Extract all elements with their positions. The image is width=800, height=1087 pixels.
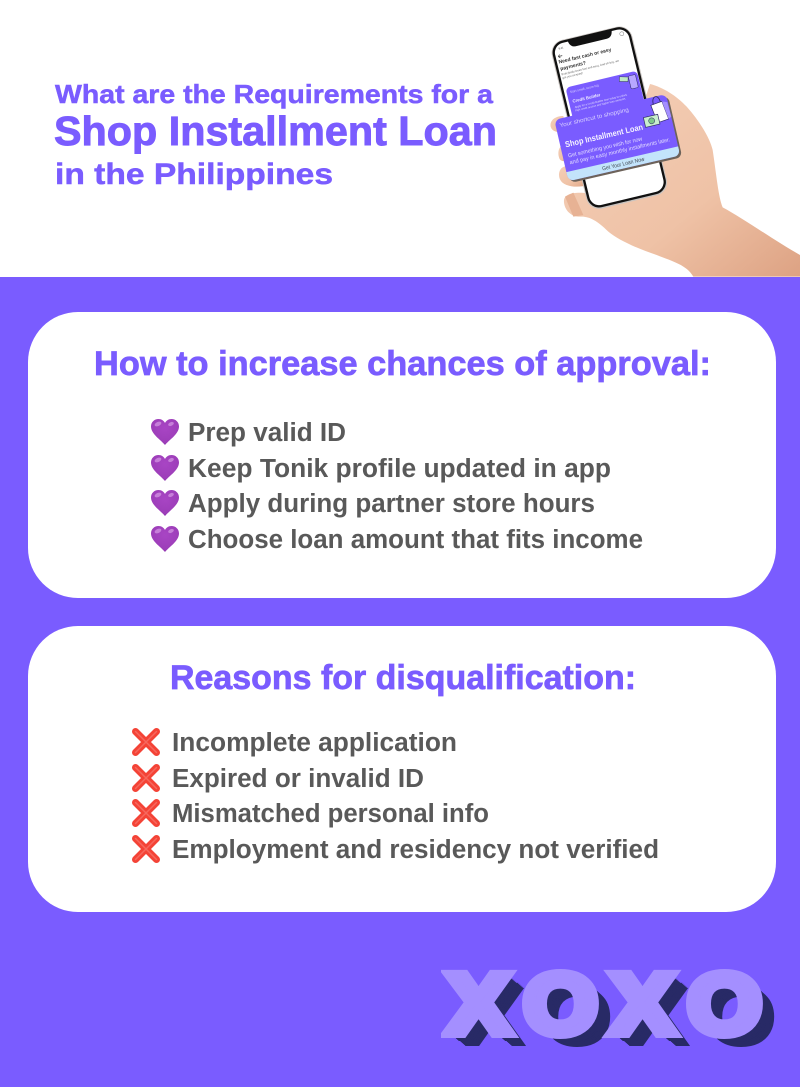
panel: reasons for disqualification [28,626,776,912]
phone in hand illustration [549,24,800,277]
card: Shop Installment Loan: Get Your Loan Now [602,157,646,172]
title: Shop Installment Loan [54,108,497,154]
list: disqualification reasons: Employment and residency not verified [172,836,659,864]
phone: payments? [560,60,587,72]
list: disqualification reasons: Expired or invalid ID [172,765,424,793]
card: Shop Installment Loan: Your shortcut to shopping [559,107,629,129]
list: disqualification reasons: Mismatched personal info [172,800,489,828]
list: disqualification reasons [136,729,659,864]
card: Shop Installment Loan [554,94,682,183]
phone: Need fast cash or easy [558,47,612,66]
phone: Start small, score big [569,83,599,94]
header background [0,0,800,277]
heading: approval: How to increase chances of approval: [94,345,711,383]
heading: disqualification: Reasons for disqualification: [170,659,636,697]
panel: how to increase chances of approval [28,312,776,598]
phone: Apply for a Credit Builder loan today to unlock [574,92,628,109]
phone: Everybody loves fast and easy. And oh boy, we [561,59,620,76]
card: Shop Installment Loan: Shop Installment Loan [564,122,644,149]
phone: Credit Builder [572,92,601,104]
title: What are the Requirements for a [55,79,494,109]
card: Shop Installment Loan: and pay in easy monthly installments later. [569,137,671,166]
card: Shop Installment Loan: Get something you wish for now [568,136,644,159]
phone: got you covered! [562,71,583,80]
phone: high credit access and higher loan amounts. [575,96,627,112]
list: approval tips [151,419,643,554]
phone [549,24,670,212]
list: approval tips: Apply during partner store hours [188,490,595,518]
phone: 9:41 [558,45,564,51]
icon: shopping bag and cash [639,94,672,127]
title [54,79,497,191]
list: disqualification reasons: Incomplete application [172,729,457,757]
XOXO sign-off lettering: XOXO [446,957,774,1051]
list: approval tips: Prep valid ID [188,419,346,447]
icon: hand [550,84,800,277]
list: approval tips: Choose loan amount that fits income [188,526,643,554]
title: in the Philippines [55,158,333,191]
list: approval tips: Keep Tonik profile updated in app [188,455,611,483]
